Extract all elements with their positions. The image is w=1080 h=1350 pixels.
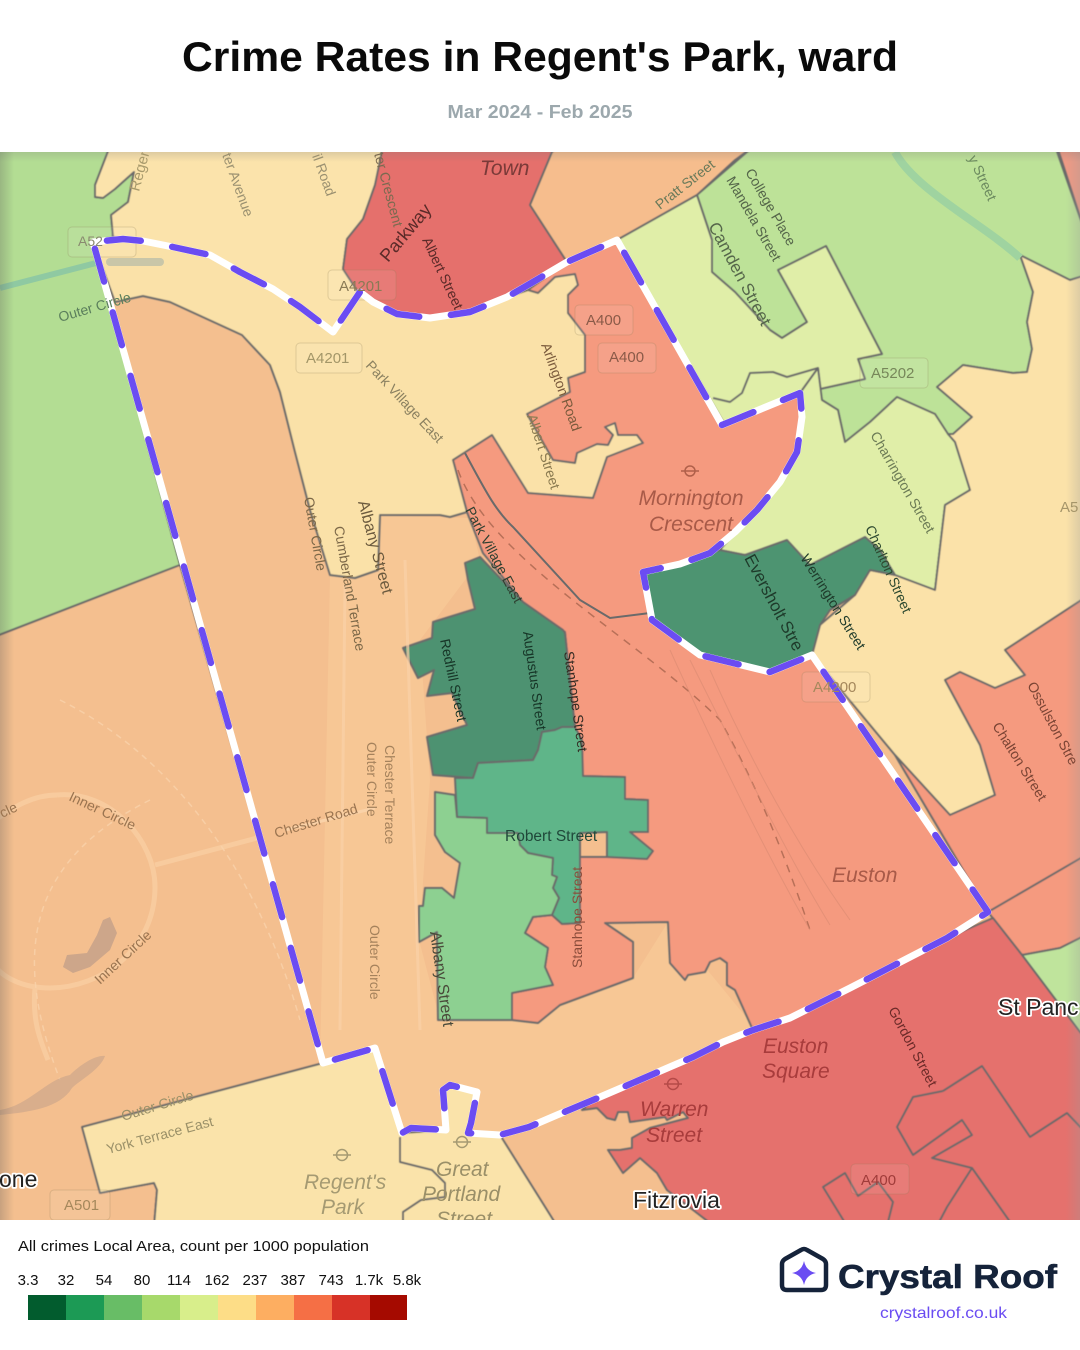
road labels: Camden Street (704, 219, 775, 329)
road labels: y Street (965, 153, 1000, 203)
subtitle: date range: Mar 2024 - Feb 2025 (448, 101, 632, 122)
choropleth zones (0, 146, 1080, 1226)
title: Crime Rates in Regent's Park, ward (182, 33, 898, 80)
road labels: Park (321, 1196, 366, 1219)
zone: Eversholt dark green (643, 537, 895, 672)
road labels: A4200 (813, 679, 856, 696)
road labels: Redhill Street (437, 637, 470, 723)
road labels: Charrington Street (867, 428, 939, 536)
legend scale labels: 743 (318, 1272, 344, 1289)
logo wordmark: Crystal Roof (838, 1258, 1058, 1295)
road labels: Pratt Street (652, 156, 718, 212)
legend scale labels: 80 (134, 1272, 150, 1289)
road labels: A5202 (871, 365, 914, 382)
road labels: Chester Terrace (382, 745, 398, 845)
road labels: Town (480, 157, 529, 180)
ward boundary: purple dashes (93, 239, 988, 1135)
road shields (50, 227, 928, 1220)
zone: north-east green (697, 146, 1080, 442)
road labels: Eversholt Stre (740, 551, 807, 654)
Euston Square internal boundaries (823, 1066, 1080, 1226)
zone: north-west top yellow (95, 146, 383, 332)
legend scale labels: 162 (204, 1272, 230, 1289)
road labels: Park Village East (363, 357, 447, 446)
road labels: il Road (309, 152, 339, 198)
central orange strip (320, 515, 755, 1135)
zone: north-west park green (0, 146, 180, 637)
legend scale labels (18, 1272, 422, 1289)
icon: Euston Square station (664, 1078, 682, 1090)
zone: Camden internal boundary (713, 368, 818, 402)
road labels: College Place (742, 166, 800, 248)
road labels: A400 (586, 312, 621, 329)
legend scale labels: 1.7k (355, 1272, 384, 1289)
zone: south yellow (Regent's Park and Great Portland Street) (82, 1048, 557, 1226)
zone: north-east salmon corner (1058, 152, 1080, 216)
road labels: Parkway (376, 200, 435, 266)
road labels: Street (646, 1124, 703, 1147)
legend scale labels: 114 (167, 1272, 191, 1289)
road labels: Outer Circle (119, 1087, 196, 1124)
road labels: Euston (763, 1035, 828, 1058)
zone: Euston salmon (453, 240, 988, 1030)
Great Portland boundary (400, 1137, 445, 1226)
icon: Great Portland Street station (453, 1136, 471, 1148)
road labels: Albert Street (524, 412, 563, 491)
zone: east yellow (812, 255, 1080, 815)
road labels: ter Crescent (371, 151, 406, 229)
road labels: Mornington (638, 487, 744, 510)
road labels: Albany Street (354, 499, 396, 596)
road labels: Charlton Street (862, 523, 915, 615)
road labels: Albert Street (419, 235, 467, 312)
icon: Mornington Crescent station (681, 466, 699, 476)
road labels: A400 (609, 349, 644, 366)
road labels: Euston (832, 864, 897, 887)
road labels: St Panc (998, 994, 1079, 1020)
road labels: Park Village East (462, 504, 526, 605)
map base (110, 286, 992, 1220)
legend scale labels: 3.3 (18, 1272, 38, 1289)
ward boundary: white base (93, 239, 988, 1135)
legend (18, 1238, 422, 1320)
road labels: Ossulston Stre (1024, 679, 1080, 768)
road labels: Warren (640, 1098, 708, 1121)
zone: St Pancras green (1023, 938, 1080, 1030)
road labels: Augustus Street (520, 630, 550, 731)
zone: Robert Street mid green (455, 727, 653, 924)
legend colour bar (28, 1295, 407, 1320)
Chalton internal boundary (988, 855, 1080, 912)
lake: Regent's Park (63, 917, 117, 973)
road labels: Albany Street (426, 930, 456, 1028)
road labels: Cumberland Terrace (331, 525, 369, 652)
legend scale labels: 237 (242, 1272, 268, 1289)
legend scale labels: 387 (280, 1272, 306, 1289)
road labels: Outer Circle (56, 289, 133, 325)
road labels: Inner Circle (67, 788, 139, 833)
zone: Chalton salmon (895, 597, 1080, 955)
zone: Stanhope light green (419, 792, 559, 1020)
road labels: A5 (1060, 499, 1078, 516)
legend scale labels: 32 (58, 1272, 74, 1289)
zone: top orange (530, 152, 746, 258)
road labels: Robert Street (505, 828, 598, 845)
logo url: crystalroof.co.uk (880, 1305, 1008, 1322)
road labels: Street (436, 1208, 493, 1231)
zone: south-west orange park (0, 565, 323, 1226)
road labels: Arlington Road (538, 341, 585, 433)
legend scale labels: 5.8k (393, 1272, 422, 1289)
road labels: one (0, 1166, 37, 1192)
zone: Camden light green (617, 195, 882, 425)
road labels: A400 (861, 1172, 896, 1189)
road labels: Mandela Street (723, 174, 785, 264)
road labels: A52 (78, 233, 103, 249)
zone: Parkway red (343, 146, 567, 318)
road labels: Gordon Street (885, 1004, 941, 1089)
road labels: A4201 (339, 278, 382, 295)
road labels: Outer Circle (367, 925, 383, 1000)
road labels: Stanhope Street (569, 867, 585, 968)
road labels: A501 (64, 1197, 99, 1214)
road labels: Chalton Street (989, 719, 1051, 804)
zone: Augustus dark green (403, 557, 575, 778)
road labels: York Terrace East (105, 1113, 215, 1157)
icon: house with sparkle (782, 1249, 826, 1290)
zone: Charrington light green (720, 368, 970, 590)
legend title: All crimes Local Area, count per 1000 population (18, 1238, 369, 1255)
road labels: Regent (126, 141, 156, 193)
lake: south park (0, 1056, 105, 1115)
zone: north yellow (93, 239, 643, 578)
road labels: Crescent (649, 513, 734, 536)
road labels: Stanhope Street (561, 650, 591, 753)
road labels: Regent's (304, 1171, 387, 1194)
road labels: Great (436, 1158, 490, 1181)
road labels: ter Avenue (219, 151, 257, 219)
logo: Crystal Roof (782, 1249, 1058, 1322)
road labels: Outer Circle (301, 496, 330, 572)
road labels: Square (762, 1060, 830, 1083)
road labels: A4201 (306, 350, 349, 367)
road labels: Inner Circle (91, 927, 155, 987)
road labels: Fitzrovia (633, 1187, 720, 1213)
road labels: Outer Circle (364, 742, 380, 817)
edge shading (0, 152, 1080, 1220)
zone: Euston Square red (582, 918, 1080, 1226)
icon: Regent's Park station (333, 1150, 351, 1160)
road labels: Chester Road (272, 800, 359, 841)
legend scale labels: 54 (96, 1272, 112, 1289)
map texture: roads and paths (0, 152, 1080, 1080)
road labels: Werrington Street (797, 551, 869, 653)
road labels: Portland (422, 1183, 502, 1206)
